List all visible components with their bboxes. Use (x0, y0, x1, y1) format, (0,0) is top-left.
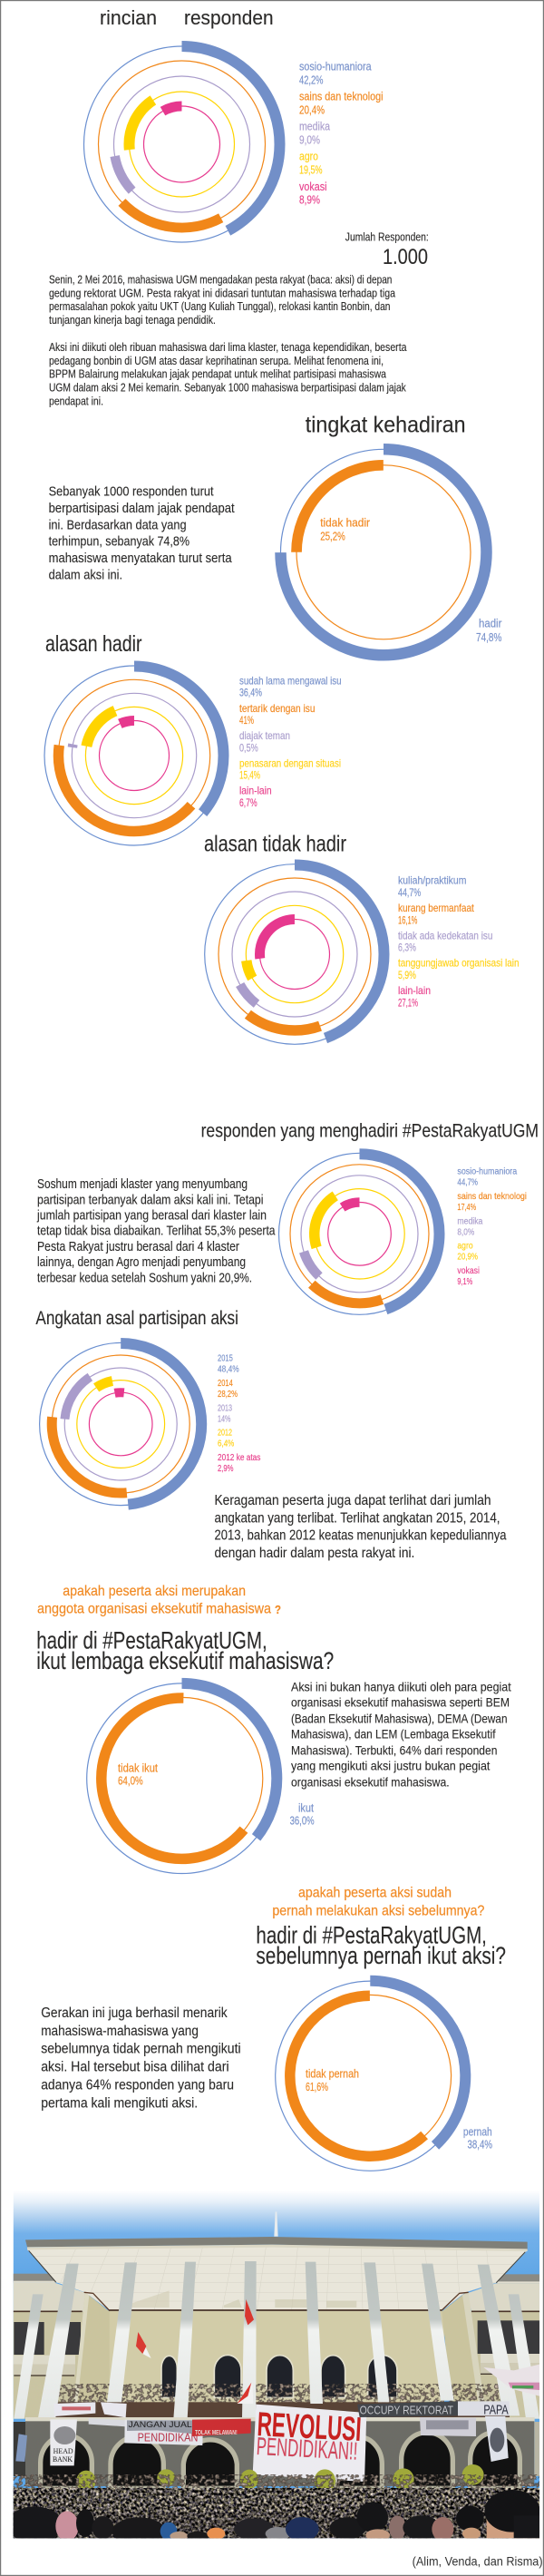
question: anggota organisasi eksekutif: apakah peserta aksi merupakan (63, 1584, 246, 1599)
label: tidak hadir (320, 516, 371, 543)
crowd (14, 2474, 539, 2538)
text block: gerakan: Gerakan ini juga berhasil menarik (41, 2005, 228, 2021)
label: ikut: 36,0% (290, 1814, 315, 1828)
question: anggota organisasi eksekutif (37, 1584, 281, 1616)
label: pernah: 38,4% (468, 2138, 492, 2152)
text block: intro: UGM dalam aksi 2 Mei kemarin. Sebanyak 1000 mahasiswa berpartisipasi dalam jajak (49, 382, 406, 395)
chart: executive body rings (69, 1665, 295, 1892)
label: pernah: pernah (463, 2125, 492, 2139)
text block: intro: BPPM Balairung melakukan jajak pendapat untuk melihat partisipasi mahasiswa (49, 368, 386, 381)
legend: clusters: 8,9% (299, 194, 320, 207)
text block: intro: pendapat ini. (49, 395, 103, 408)
text block: attendance: berpartisipasi dalam jajak pendapat (49, 501, 235, 516)
legend: clusters: medika (299, 121, 330, 133)
heading: tingkat kehadiran: tingkat kehadiran (306, 413, 466, 438)
legend: clusters: 9,0% (299, 133, 320, 146)
photo: protest at UGM rectorate (7, 2191, 540, 2545)
legend: reasons for attending: 36,4% (239, 687, 262, 699)
panel: alasan tidak hadir (198, 831, 520, 1051)
banners (15, 2365, 539, 2482)
legend: reasons for not attending: tanggungjawab organisasi lain (398, 957, 519, 970)
legend: clusters: vokasi (299, 181, 326, 193)
text block: keragaman peserta (214, 1493, 507, 1561)
text block: attendance: ini. Berdasarkan data yang (49, 517, 187, 532)
text block: gerakan: sebelumnya tidak pernah mengikuti (41, 2042, 241, 2057)
text block: intro: permasalahan pokok yaitu UKT (Uang Kuliah Tunggal), relokasi kantin Bonbin, dan (49, 300, 391, 313)
main back wall (109, 2311, 444, 2402)
legend: reasons for not attending: 16,1% (398, 913, 418, 926)
legend: reasons for not attending: 44,7% (398, 886, 421, 899)
text block: soshum: partisipan terbanyak dalam aksi kali ini. Tetapi (37, 1193, 263, 1207)
text block: attendance: Sebanyak 1000 responden turut (49, 484, 214, 500)
banners: BANK (53, 2454, 73, 2464)
legend: attendee clusters: sosio-humaniora (457, 1166, 517, 1177)
text block: soshum: terbesar kedua setelah Soshum yakni 20,9%. (37, 1271, 252, 1285)
arched windows (161, 2355, 397, 2397)
banners: OCCUPY REKTORAT (360, 2405, 453, 2417)
legend: reasons for not attending: kurang bermanfaat (398, 902, 474, 914)
text block: soshum (36, 1177, 276, 1285)
callout: jumlah responden: 1.000 (383, 245, 428, 269)
text block: soshum: Pesta Rakyat justru berasal dari 4 klaster (37, 1240, 239, 1254)
text block: attendance: terhimpun, sebanyak 74,8% (49, 534, 189, 550)
legend: cohorts: 28,2% (218, 1390, 238, 1400)
legend: reasons for not attending: 27,1% (398, 996, 418, 1009)
balcony people (58, 2384, 500, 2402)
label: tidak hadir: 25,2% (320, 530, 345, 543)
legend: attendee clusters: vokasi (457, 1265, 480, 1276)
legend: reasons for not attending: 6,3% (398, 942, 416, 954)
legend: reasons for attending: penasaran dengan situasi (239, 757, 341, 770)
question: pernah melakukan aksi (272, 1886, 484, 1918)
label: ikut: ikut (298, 1800, 314, 1814)
legend: attendee clusters: 9,1% (457, 1276, 472, 1287)
legend: reasons for not attending: kuliah/praktikum (398, 874, 466, 887)
text block: gerakan: pertama kali mengikuti aksi. (41, 2095, 198, 2111)
text block: pegiat organisasi: yang mengikuti aksi justru bukan pegiat (291, 1759, 490, 1773)
legend: reasons for attending: 15,4% (239, 769, 260, 782)
text block: gerakan (41, 2005, 241, 2111)
legend: cohorts: 48,4% (218, 1365, 239, 1375)
columns (14, 2261, 539, 2419)
legend: cohorts: 2014 (218, 1379, 233, 1389)
legend: cohorts: 2,9% (218, 1464, 234, 1474)
legend: clusters: sosio-humaniora (299, 60, 372, 73)
ceiling (27, 2247, 528, 2310)
legend: clusters: sains dan teknologi (299, 91, 384, 103)
legend: reasons for attending: 6,7% (239, 796, 257, 809)
text block: pegiat organisasi: organisasi eksekutif mahasiswa seperti BEM (291, 1695, 510, 1710)
text block: pegiat organisasi: Mahasiswa). Terbukti, 64% dari responden (291, 1742, 497, 1757)
legend: attendee clusters: sains dan teknologi (457, 1191, 527, 1202)
panel: rincian responden (49, 6, 429, 408)
lower arches (41, 2433, 520, 2488)
legend: clusters: 19,5% (299, 164, 323, 177)
chart: reasons for not attending rings (198, 857, 392, 1051)
callout: jumlah responden (345, 229, 429, 269)
label: pernah (463, 2125, 492, 2152)
callout: jumlah responden: Jumlah Responden: (345, 229, 429, 243)
text block: soshum: jumlah partisipan yang berasal dari klaster lain (36, 1208, 267, 1223)
heading: ikut lembaga eksekutif: hadir di #PestaRakyatUGM, (36, 1627, 267, 1654)
legend: attendee clusters (457, 1166, 527, 1287)
piers (74, 2293, 484, 2402)
legend: cohorts: 2012 (218, 1429, 232, 1439)
panel: alasan hadir (27, 631, 342, 863)
chart: prior action rings (257, 1963, 483, 2190)
label: hadir: hadir (479, 617, 502, 630)
chart: cohort rings (40, 1342, 202, 1506)
label: tidak hadir: tidak hadir (320, 516, 371, 530)
flags (136, 2299, 254, 2404)
text block: gerakan: aksi. Hal tersebut bisa dilihat dari (41, 2060, 229, 2075)
legend: cohorts: 2013 (218, 1403, 232, 1413)
label: tidak pernah: 61,6% (306, 2080, 328, 2093)
heading: sebelumnya pernah ikut aksi (256, 1921, 506, 1969)
banners: JANGAN JUAL (129, 2420, 192, 2429)
text block: pegiat organisasi: (Badan Eksekutif Mahasiswa), DEMA (Dewan (291, 1711, 508, 1725)
legend: cohorts: 2015 (218, 1354, 233, 1364)
panel: tingkat kehadiran (49, 413, 502, 655)
label: hadir: 74,8% (476, 630, 502, 644)
chart: attendance rings (281, 449, 486, 655)
text block: attendance: dalam aksi ini. (49, 567, 122, 582)
roof edge (25, 2237, 528, 2249)
heading: rincian responden (100, 6, 274, 29)
legend: reasons for attending: lain-lain (239, 785, 272, 797)
heading: rincian responden: rincian (100, 6, 157, 29)
legend: cohorts (218, 1354, 260, 1474)
label: tidak pernah: tidak pernah (306, 2067, 359, 2081)
legend: cohorts: 2012 ke atas (218, 1453, 260, 1463)
legend: reasons for not attending: tidak ada kedekatan isu (398, 929, 492, 942)
text block: intro: gedung rektorat UGM. Pesta rakyat ini didasari tuntutan mahasiswa terhadap tiga (49, 287, 395, 299)
question: pernah melakukan aksi: apakah peserta aksi sudah (298, 1886, 452, 1901)
text block: intro: pedagang bonbin di UGM atas dasar keprihatinan serupa. Melihat fenomena ini, (49, 355, 384, 367)
ledge and lower wall (25, 2417, 535, 2422)
label: tidak ikut: tidak ikut (118, 1761, 158, 1774)
side wings (14, 2311, 539, 2419)
label: hadir (476, 617, 502, 644)
text block: attendance: mahasiswa menyatakan turut serta (49, 551, 232, 566)
legend: reasons for attending: diajak teman (239, 729, 290, 742)
wing roofs (14, 2274, 539, 2311)
legend: clusters: agro (299, 151, 318, 163)
legend: cohorts: 14% (218, 1414, 231, 1424)
panel: angkatan (35, 1308, 507, 1561)
legend: reasons for not attending: 5,9% (398, 969, 416, 981)
text block: soshum: tetap tidak bisa diabaikan. Terlihat 55,3% peserta (37, 1225, 276, 1239)
question: anggota organisasi eksekutif: ? (275, 1603, 281, 1616)
legend: attendee clusters: 8,0% (457, 1226, 474, 1237)
text block: pegiat organisasi: Mahasiswa), dan LEM (Lembaga Eksekutif (291, 1727, 496, 1742)
chart: respondent clusters rings (69, 32, 295, 257)
text block: keragaman peserta: dengan hadir dalam pesta rakyat ini. (214, 1546, 414, 1561)
balcony railing (53, 2402, 510, 2418)
heading: alasan hadir: alasan hadir (45, 631, 141, 657)
banners: HEAD (53, 2446, 73, 2455)
label: tidak pernah (306, 2067, 359, 2093)
chart: attendee clusters rings (271, 1146, 448, 1322)
text block: gerakan: mahasiswa-mahasiswa yang (41, 2024, 199, 2039)
heading: rincian responden: responden (184, 6, 274, 29)
banners: TOLAK MELAWAN! (195, 2428, 238, 2436)
text block: pegiat organisasi (291, 1679, 511, 1789)
heading: ikut lembaga eksekutif: ikut lembaga eksekutif mahasiswa? (36, 1647, 334, 1674)
legend: clusters (299, 60, 384, 207)
text block: intro: Aksi ini diikuti oleh ribuan mahasiswa dari lima klaster, tenaga kependidikan, beserta (49, 341, 407, 354)
legend: attendee clusters: medika (457, 1215, 483, 1226)
text block: soshum: lainnya, dengan Agro menjadi penyumbang (37, 1255, 246, 1270)
legend: reasons for not attending (398, 874, 519, 1009)
label: tidak ikut (118, 1761, 158, 1788)
bushes (76, 2464, 484, 2488)
text block: pegiat organisasi: organisasi eksekutif mahasiswa. (291, 1774, 450, 1789)
banners: PENDIDIKAN (138, 2432, 198, 2444)
heading: angkatan asal partisipan aksi: Angkatan asal partisipan aksi (35, 1308, 238, 1329)
legend: attendee clusters: 20,9% (457, 1252, 478, 1263)
text block: intro: tunjangan kinerja bagi tenaga pendidik. (49, 314, 216, 327)
banners: REVOLUSI (257, 2405, 363, 2448)
legend: cohorts: 6,4% (218, 1439, 234, 1449)
legend: attendee clusters: agro (457, 1241, 473, 1252)
text block: intro (49, 273, 407, 408)
banners: PENDIDIKAN!! (256, 2432, 358, 2465)
heading: ikut lembaga eksekutif (36, 1627, 334, 1674)
legend: reasons for attending: sudah lama mengawal isu (239, 675, 342, 688)
label: ikut (290, 1800, 315, 1828)
question: anggota organisasi eksekutif: anggota organisasi eksekutif mahasiswa (37, 1601, 271, 1616)
legend: reasons for not attending: lain-lain (398, 984, 431, 997)
chart: reasons for attending rings (27, 649, 241, 863)
text block: intro: Senin, 2 Mei 2016, mahasiswa UGM mengadakan pesta rakyat (baca: aksi) di depan (49, 273, 392, 286)
foreground heads (13, 2490, 539, 2538)
legend: attendee clusters: 17,4% (457, 1202, 476, 1213)
legend: reasons for attending: tertarik dengan isu (239, 702, 316, 715)
label: tidak ikut: 64,0% (118, 1774, 143, 1788)
question: pernah melakukan aksi: pernah melakukan aksi sebelumnya? (272, 1903, 484, 1918)
panel: pengalaman aksi (41, 1886, 506, 2190)
banners: PAPA (483, 2404, 509, 2418)
text block: keragaman peserta: Keragaman peserta juga dapat terlihat dari jumlah (214, 1493, 491, 1508)
legend: attendee clusters: 44,7% (457, 1177, 478, 1188)
legend: reasons for attending: 0,5% (239, 741, 258, 754)
legend: reasons for attending (239, 675, 342, 809)
text block: soshum: Soshum menjadi klaster yang menyumbang (37, 1177, 248, 1192)
panel: responden yang menghadiri (36, 1119, 539, 1322)
legend: reasons for attending: 41% (239, 714, 254, 727)
text block: pegiat organisasi: Aksi ini bukan hanya diikuti oleh para pegiat (291, 1679, 511, 1693)
panel: lembaga eksekutif (36, 1584, 511, 1892)
text block: attendance (49, 484, 235, 582)
legend: clusters: 20,4% (299, 103, 325, 116)
text block: gerakan: adanya 64% responden yang baru (41, 2077, 234, 2093)
legend: clusters: 42,2% (299, 73, 323, 86)
heading: alasan tidak hadir: alasan tidak hadir (204, 831, 346, 856)
